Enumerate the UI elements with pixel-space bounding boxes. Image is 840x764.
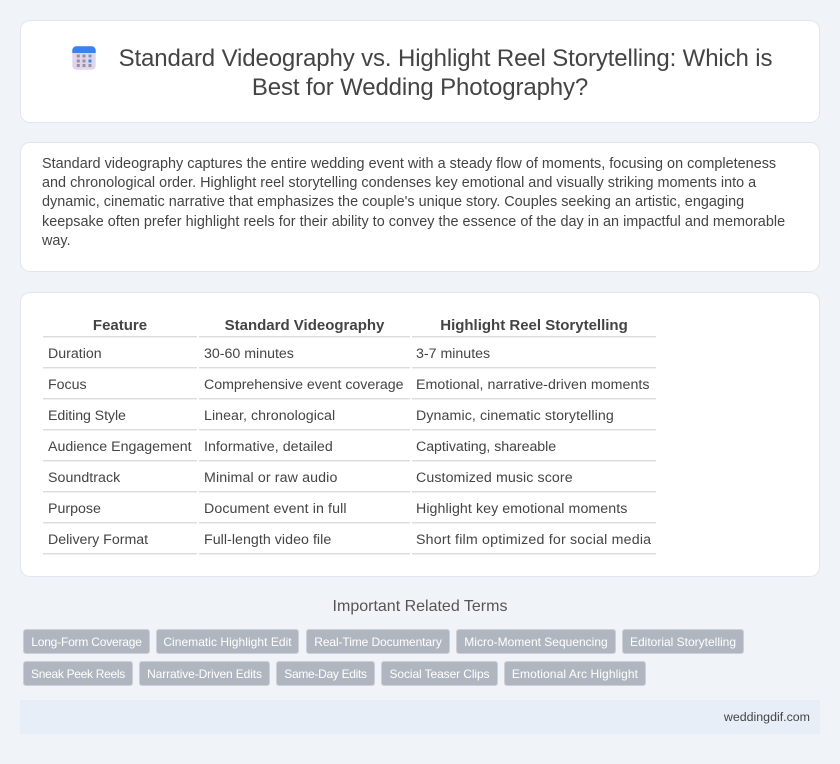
- table header: highlight reel storytelling: Highlight Reel Storytelling: [440, 317, 628, 334]
- comparison table: Highlight key emotional moments: [416, 501, 627, 517]
- title: [119, 45, 772, 101]
- footer source text: weddingdif.com: [724, 710, 810, 724]
- comparison table: 3-7 minutes: [416, 346, 490, 362]
- comparison table: 30-60 minutes: [204, 346, 294, 362]
- tag: Real-Time Documentary: [314, 635, 442, 649]
- header panel: [20, 20, 820, 123]
- intro text: and chronological order. Highlight reel storytelling condenses key emotional and visually striking moments into a: [42, 175, 756, 191]
- tag: Cinematic Highlight Edit: [163, 635, 292, 649]
- tag: [622, 629, 744, 654]
- row: focus: Focus: [48, 377, 87, 393]
- intro text: way.: [42, 233, 71, 249]
- comparison table: Short film optimized for social media: [416, 532, 651, 548]
- comparison table: Customized music score: [416, 470, 573, 486]
- tag: [139, 661, 270, 686]
- row: audience engagement: Audience Engagement: [48, 439, 192, 455]
- tag: [306, 629, 450, 654]
- intro text: keepsake often prefer highlight reels for their ability to convey the essence of the day in an impactful and memorable: [42, 214, 785, 230]
- comparison table: Full-length video file: [204, 532, 331, 548]
- row: editing style: Editing Style: [48, 408, 126, 424]
- tag: Micro-Moment Sequencing: [464, 635, 608, 649]
- comparison table: Document event in full: [204, 501, 347, 517]
- intro text: dynamic, cinematic narrative that emphasizes the couple's unique story. Couples seeking an artistic, engaging: [42, 194, 744, 210]
- comparison table: Linear, chronological: [204, 408, 335, 424]
- tag: Editorial Storytelling: [630, 635, 736, 649]
- tag: Sneak Peek Reels: [31, 667, 125, 681]
- table header: standard videography: Standard Videography: [225, 317, 384, 334]
- tag: Social Teaser Clips: [390, 667, 489, 681]
- table header: feature: Feature: [93, 317, 147, 334]
- tag: [156, 629, 299, 654]
- related term tags: [23, 629, 744, 686]
- tag: [504, 661, 646, 686]
- comparison table: Dynamic, cinematic storytelling: [416, 408, 614, 424]
- comparison table: Minimal or raw audio: [204, 470, 338, 486]
- intro panel: [20, 142, 820, 272]
- row: purpose: Purpose: [48, 501, 101, 517]
- row: soundtrack: Soundtrack: [48, 470, 120, 486]
- title: Best for Wedding Photography?: [252, 74, 588, 101]
- related terms heading: Important Related Terms: [333, 598, 507, 615]
- footer bar: [20, 700, 820, 734]
- comparison table: Informative, detailed: [204, 439, 333, 455]
- tag: Same-Day Edits: [284, 667, 367, 681]
- comparison table panel: [20, 292, 820, 577]
- comparison table: Captivating, shareable: [416, 439, 556, 455]
- intro text: [42, 156, 785, 249]
- comparison table: [43, 317, 656, 555]
- intro text: Standard videography captures the entire wedding event with a steady flow of moments, focusing on completeness: [42, 156, 776, 172]
- row: delivery format: Delivery Format: [48, 532, 148, 548]
- tag: [456, 629, 616, 654]
- tag: [23, 661, 133, 686]
- icon: calendar: [72, 46, 96, 70]
- comparison table: Emotional, narrative-driven moments: [416, 377, 650, 393]
- title: Standard Videography vs. Highlight Reel Storytelling: Which is: [119, 45, 772, 72]
- tag: Long-Form Coverage: [31, 635, 142, 649]
- tag: Narrative-Driven Edits: [147, 667, 262, 681]
- tag: [23, 629, 150, 654]
- tag: [381, 661, 498, 686]
- row: duration: Duration: [48, 346, 102, 362]
- comparison table: Comprehensive event coverage: [204, 377, 403, 393]
- tag: Emotional Arc Highlight: [512, 667, 638, 681]
- tag: [276, 661, 375, 686]
